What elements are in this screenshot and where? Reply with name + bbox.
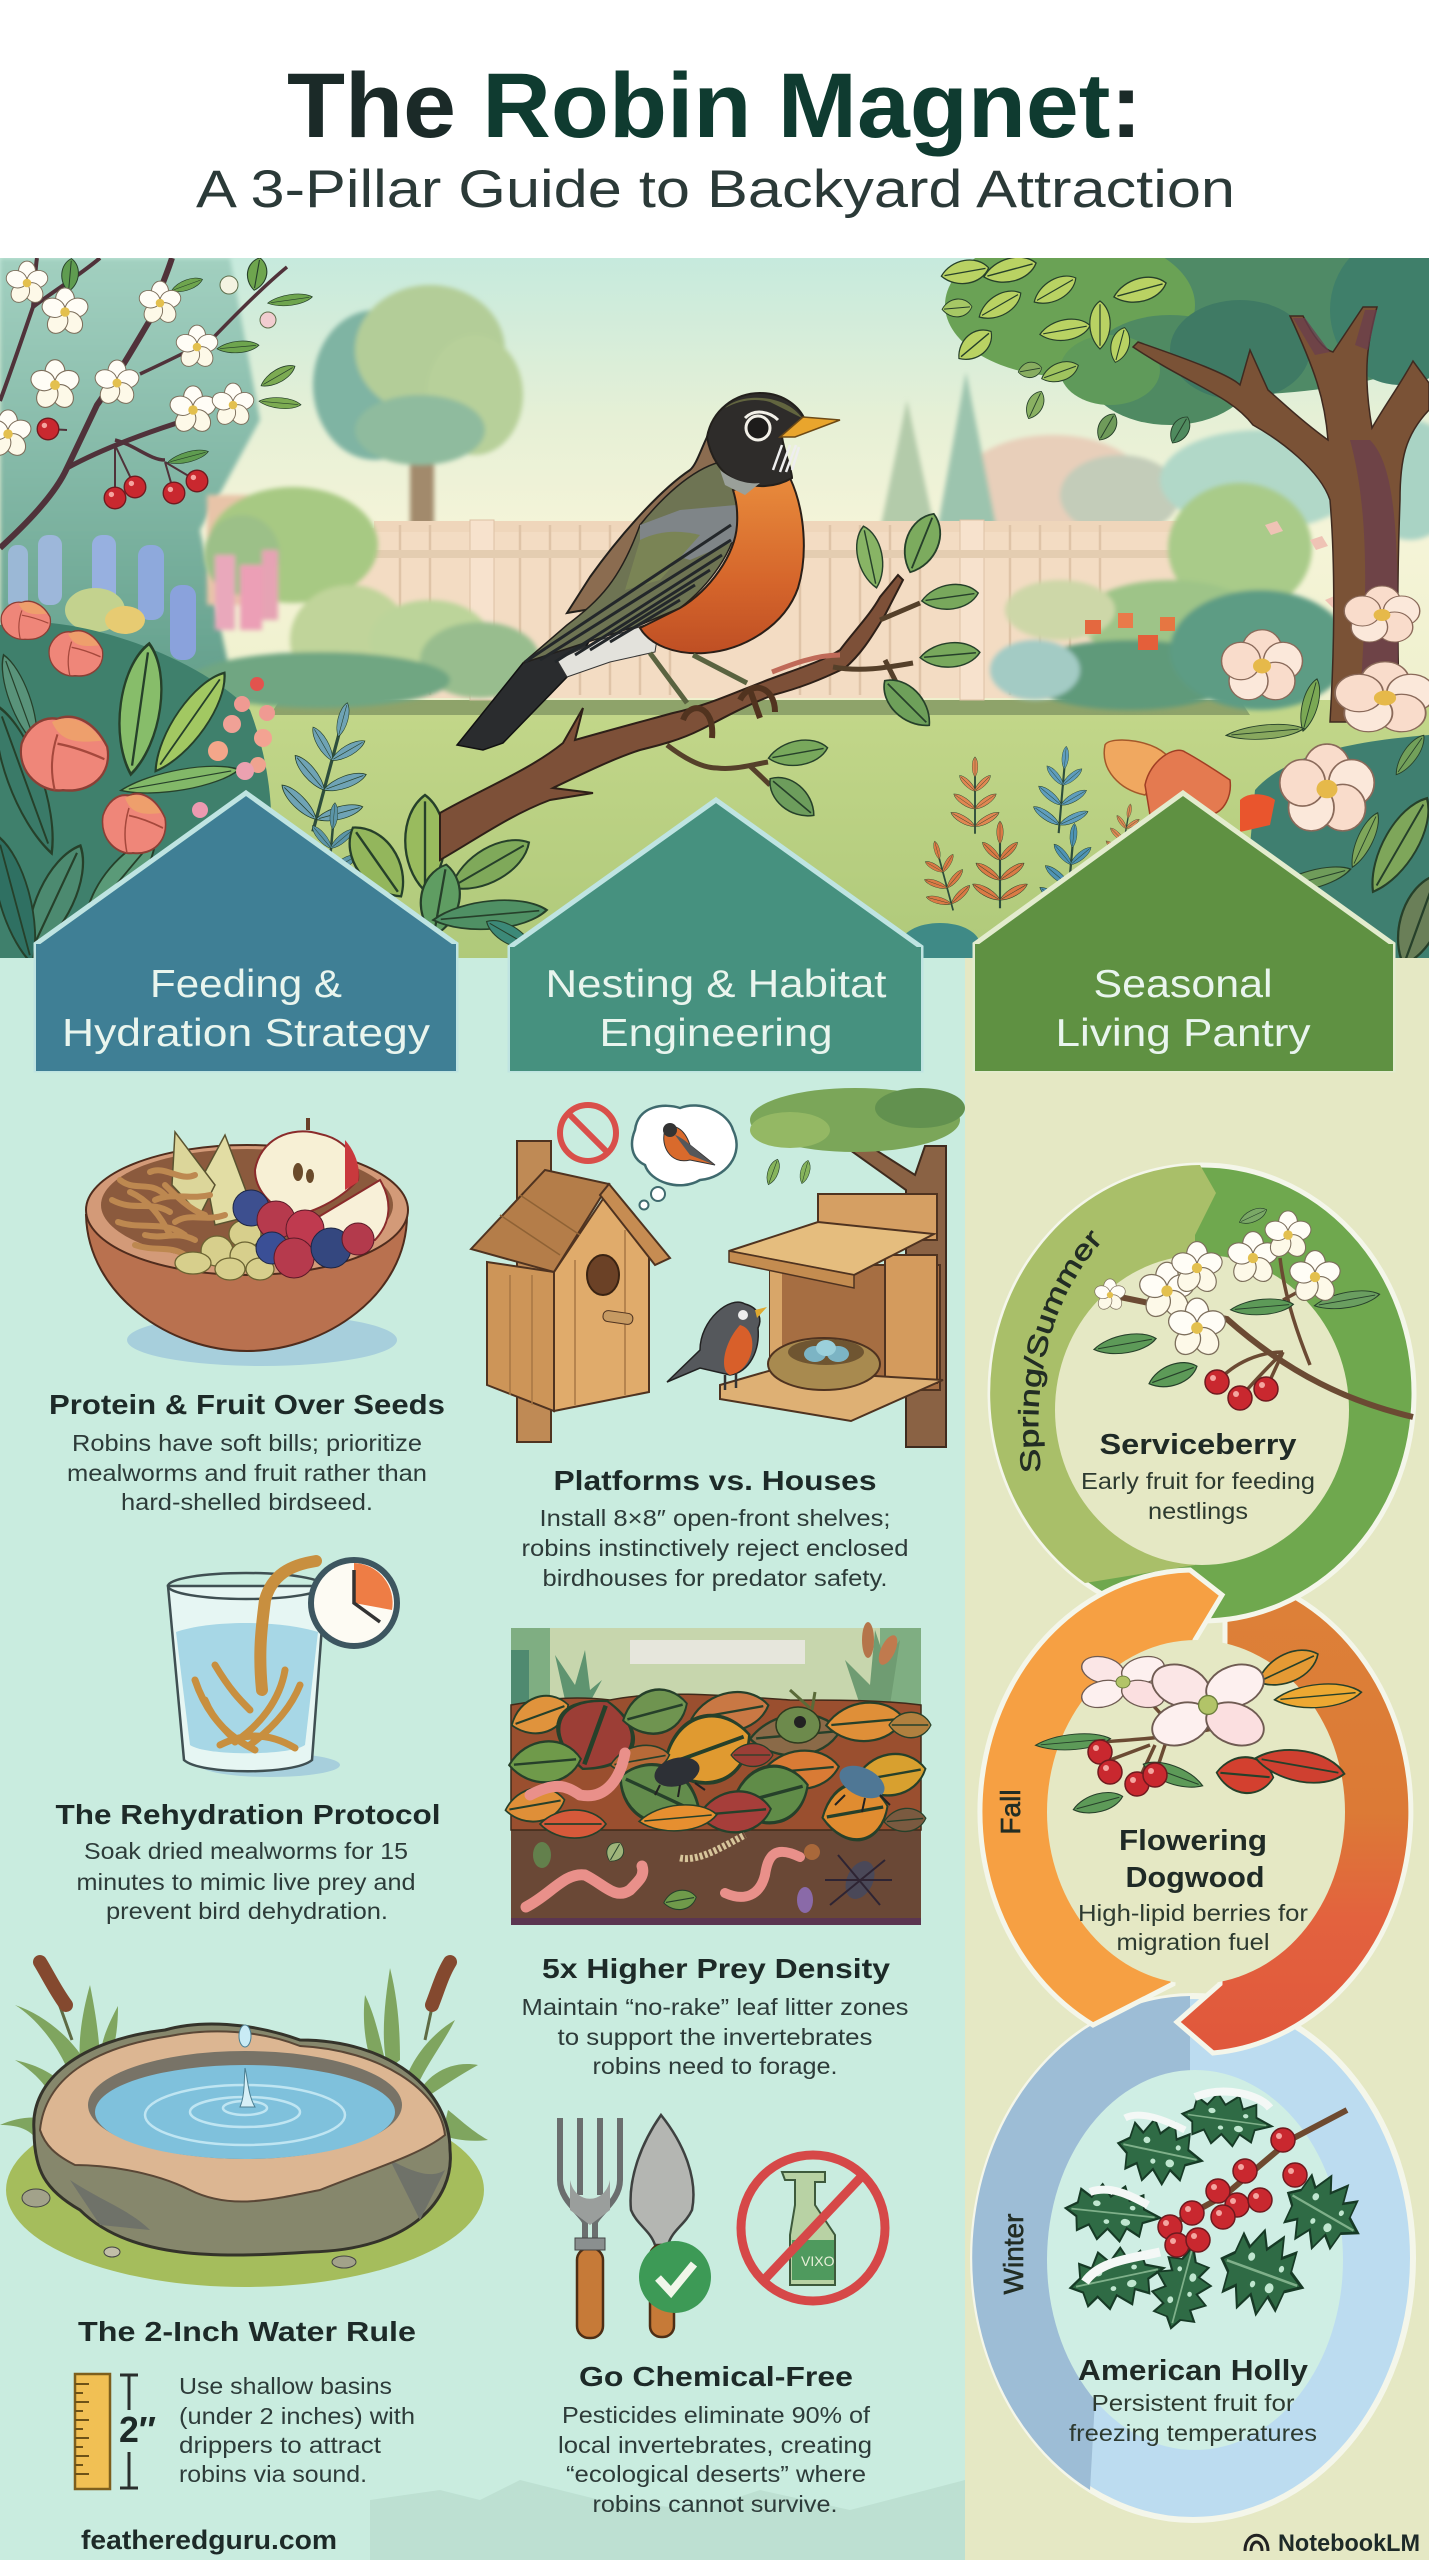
text: protein and fruit body: Robins have soft bills; prioritize [72,1430,422,1456]
text: rehydration body: minutes to mimic live prey and [76,1869,416,1895]
icon: ruler with 2 inch measure [75,2374,156,2489]
text: prey density body [522,1994,908,2079]
branch with leaves [440,508,981,860]
text: water rule body: robins via sound. [179,2461,367,2487]
text: water rule body [179,2373,415,2487]
text: flowering dogwood: migration fuel [1116,1929,1270,1955]
text: rehydration body [76,1838,416,1924]
delphiniums and orange blooms [8,521,1347,660]
text: chemical-free body [558,2402,872,2517]
pillar arrow: nesting and habitat: Nesting & Habitat [546,963,887,1006]
text: platforms body [522,1505,908,1591]
tulips [1,601,166,853]
text: american holly: freezing temperatures [1069,2420,1317,2446]
soft background trees, hills and cypress [0,258,1429,673]
text: flowering dogwood: Dogwood [1126,1862,1264,1894]
flowering branch top-left [0,256,313,548]
source credit: featheredguru.com [81,2525,337,2555]
text: serviceberry: Early fruit for feeding [1081,1468,1315,1494]
pillar arrow: seasonal pantry: Living Pantry [1056,1012,1311,1055]
icon: trowel with check mark [631,2115,711,2337]
robin [457,393,840,750]
text: platforms body: Install 8×8″ open-front shelves; [540,1505,890,1531]
text: american holly: Persistent fruit for [1092,2390,1295,2416]
pillar arrow: feeding and hydration: Hydration Strategy [62,1012,431,1055]
text: protein and fruit body [67,1430,427,1515]
icon: no pesticide spray: VIXO [801,2253,835,2269]
text: chemical-free body: local invertebrates, creating [558,2432,872,2458]
icon: enclosed birdhouse [471,1141,670,1442]
season ring: winter [972,1996,1413,2520]
faint foliage tint at page bottom [370,2480,965,2560]
illustration: leaf litter cross-section [503,1622,931,1925]
column background: seasonal pantry [965,950,1429,2560]
text: serviceberry: nestlings [1148,1498,1248,1524]
text: prey density body: to support the invertebrates [558,2024,872,2050]
text: rehydration body: prevent bird dehydration. [106,1898,388,1924]
pillar arrow: nesting and habitat [510,800,921,1071]
icon: bowl of mealworms and fruit [86,1118,408,1366]
garden beds [190,483,1350,710]
icon: glass of soaking mealworms with timer [168,1560,397,1777]
brand mark: NotebookLM: NotebookLM [1278,2530,1420,2557]
subtitle: A 3-Pillar Guide to Backyard Attraction [196,160,1235,219]
season ring: spring and summer [988,1162,1416,1624]
text: chemical-free body: Pesticides eliminate 90% of [562,2402,871,2428]
text: serviceberry: Serviceberry [1100,1429,1296,1461]
text: rehydration body: Soak dried mealworms for 15 [84,1838,408,1864]
icon: open platform shelf with nest and robin [667,1194,943,1421]
pillar arrow: seasonal pantry [975,793,1393,1071]
label: fall: Fall [995,1789,1026,1835]
pillar arrow: feeding and hydration: Feeding & [150,963,342,1006]
text: serviceberry [1081,1429,1315,1524]
text: protein and fruit body: hard-shelled birdseed. [121,1489,373,1515]
icon: robin thought bubble [632,1105,737,1210]
label: spring/summer: Spring/Summer [1018,1230,1100,1472]
icon: garden fork [560,2118,620,2338]
icon: no pesticide spray [741,2155,885,2301]
icon: prohibited sign [560,1105,616,1161]
season ring: fall [980,1570,1362,2025]
text: flowering dogwood: High-lipid berries for [1078,1900,1308,1926]
foreground right plants [900,586,1429,972]
header band [0,0,1429,258]
text: american holly: American Holly [1078,2355,1308,2387]
text: chemical-free body: robins cannot survive. [592,2491,838,2517]
text: water rule body: drippers to attract [179,2432,382,2458]
heading: go chemical-free: Go Chemical-Free [579,2361,853,2392]
text: chemical-free body: “ecological deserts” where [566,2461,866,2487]
label: winter: Winter [998,2214,1029,2294]
text: flowering dogwood [1078,1825,1308,1955]
text: water rule body: Use shallow basins [179,2373,392,2399]
pillar arrow: nesting and habitat: Engineering [600,1012,832,1055]
title: The Robin Magnet: [287,55,1142,157]
text: water rule body: (under 2 inches) with [179,2403,415,2429]
text: flowering dogwood: Flowering [1119,1825,1267,1857]
pillar arrow: seasonal pantry: Seasonal [1094,963,1272,1006]
blue plant and low leaves by branch [282,702,548,945]
heading: prey density: 5x Higher Prey Density [542,1953,890,1984]
sky and lawn [0,258,1429,960]
icon: serviceberry branch [1092,1204,1413,1417]
icon: ruler with 2 inch measure: 2″ [119,2409,156,2450]
icon: stone bird bath [0,1962,488,2287]
icon: dogwood branch [1035,1641,1362,1818]
pillar arrow: feeding and hydration [36,793,456,1071]
season arc: fall dark half [1177,1572,1411,2053]
foreground left plants [0,622,275,968]
text: prey density body: Maintain “no-rake” leaf litter zones [522,1994,908,2020]
text: prey density body: robins need to forage. [592,2053,838,2079]
heading: protein and fruit: Protein & Fruit Over Seeds [49,1389,445,1420]
heading: water rule: The 2-Inch Water Rule [78,2316,416,2347]
icon: tree beside platforms [750,1088,965,1447]
text: american holly [1069,2355,1317,2446]
text: platforms body: birdhouses for predator safety. [542,1565,888,1591]
heading: platforms vs houses: Platforms vs. Houses [554,1465,876,1496]
large tree right [940,258,1429,723]
hero illustration: garden scene [0,205,1429,972]
text: protein and fruit body: mealworms and fruit rather than [67,1460,427,1486]
heading: rehydration: The Rehydration Protocol [56,1799,440,1830]
icon: holly sprig [1063,2089,1376,2335]
text: platforms body: robins instinctively reject enclosed [522,1535,908,1561]
fence [350,520,1200,700]
